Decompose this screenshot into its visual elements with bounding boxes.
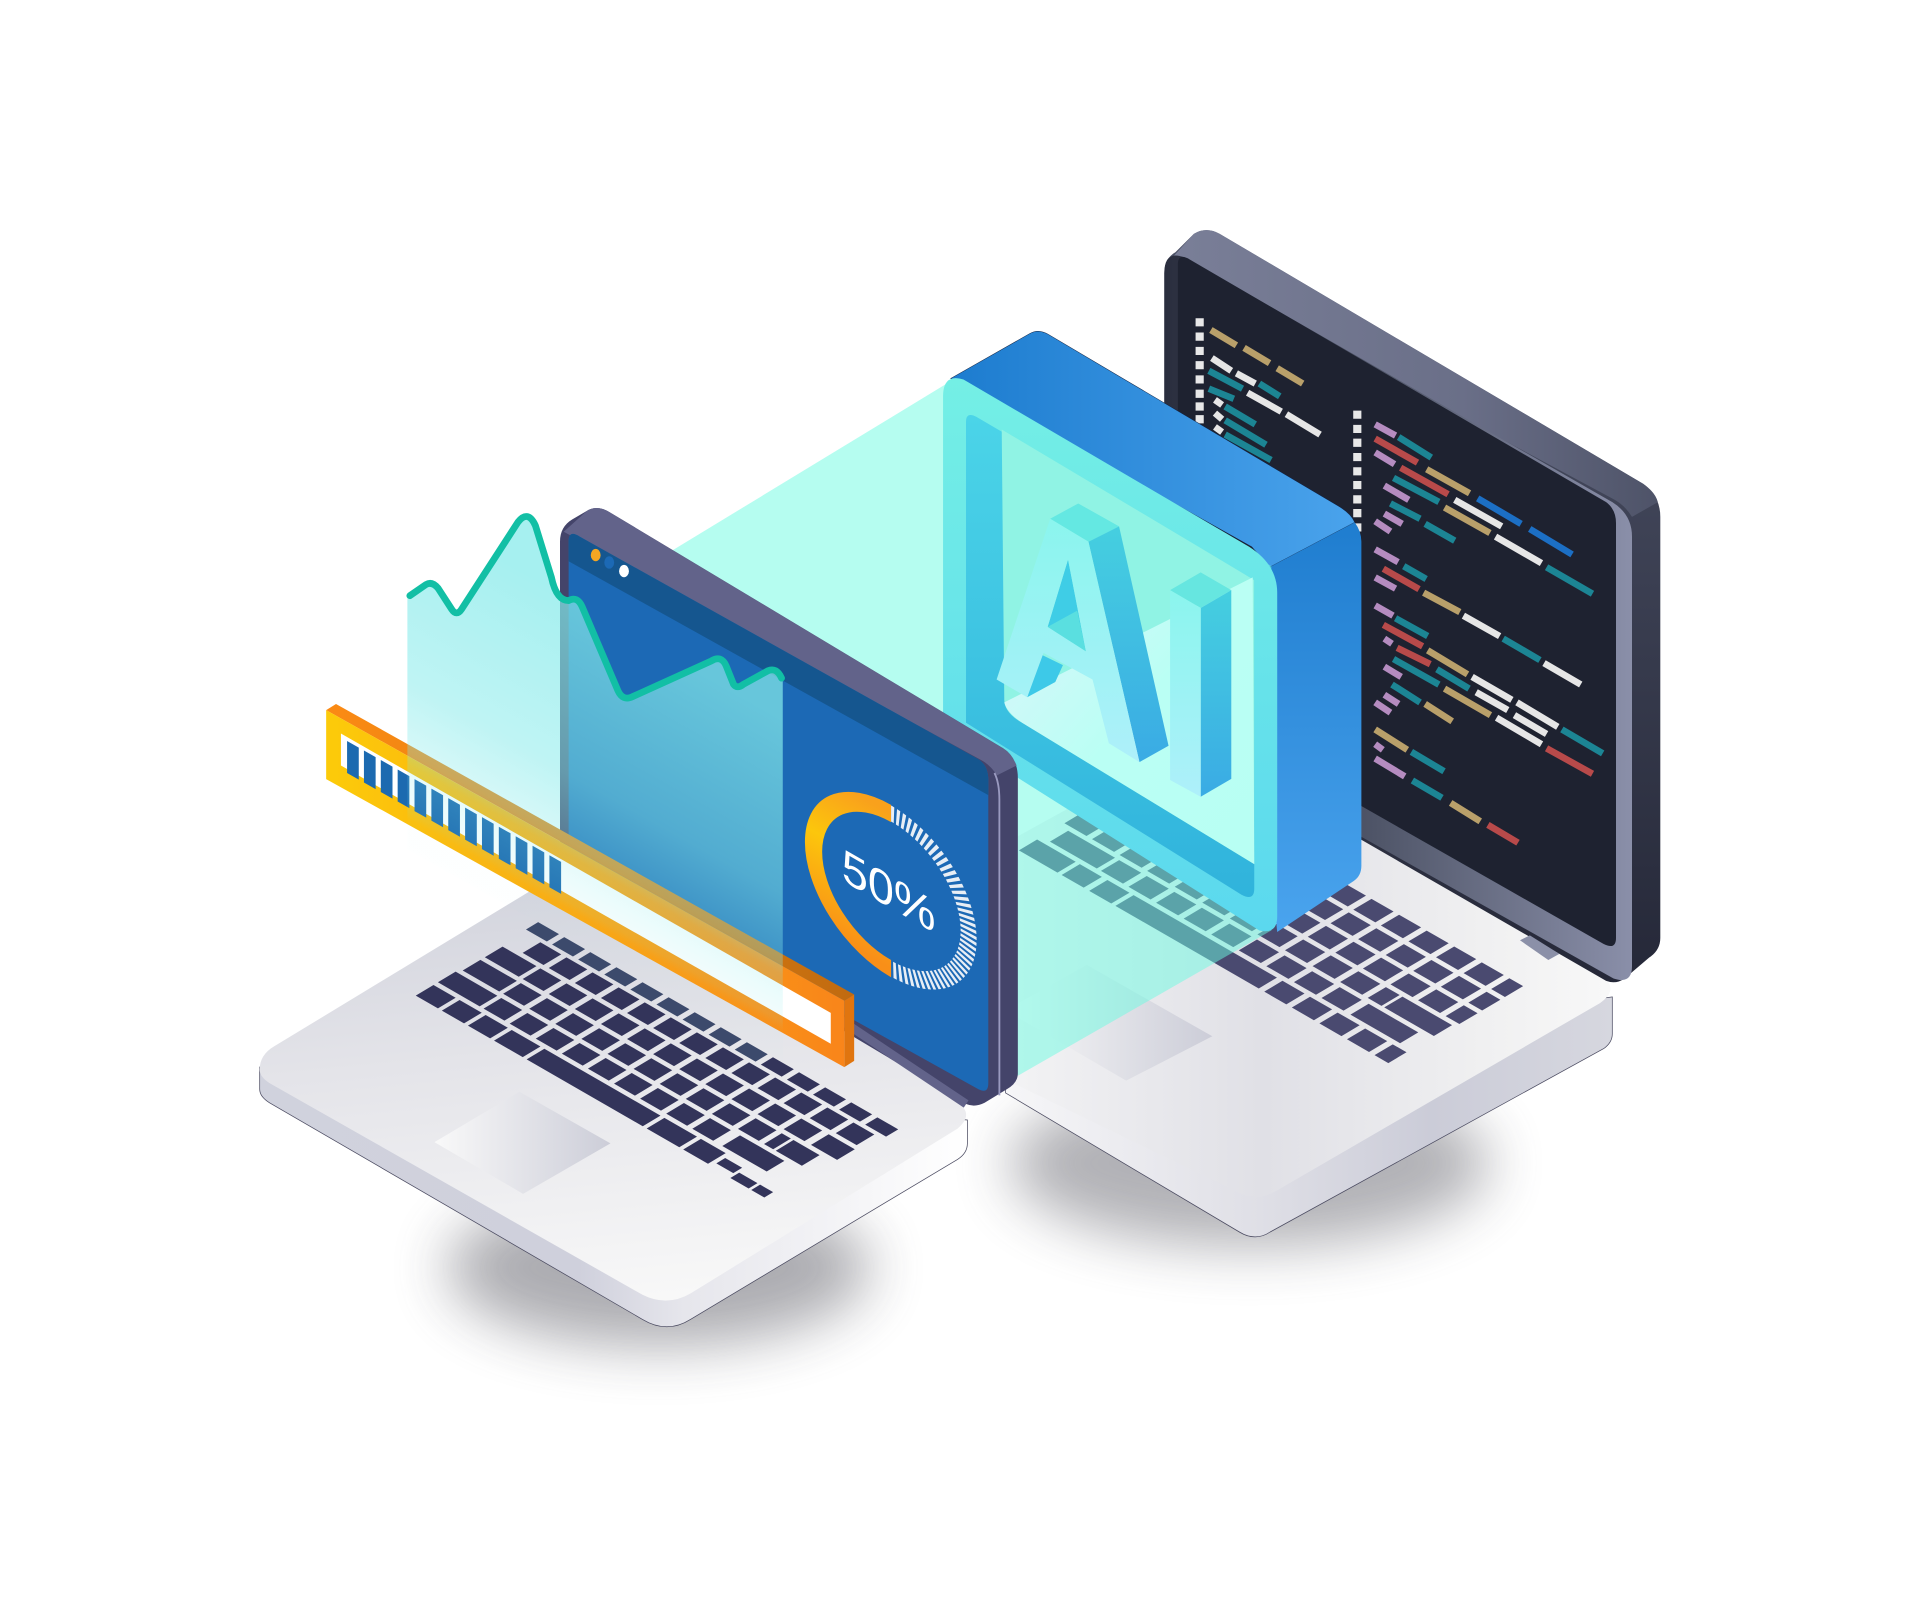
gauge ticks <box>891 814 969 1013</box>
front laptop blue screen <box>569 534 988 1091</box>
back laptop trackpad <box>1006 965 1212 1081</box>
cube inner recess <box>966 415 1254 897</box>
progress bar <box>326 704 854 1067</box>
cube window upper <box>1002 429 1254 864</box>
bar right face <box>844 994 854 1067</box>
translucent chart area <box>407 514 783 1061</box>
front laptop keyboard <box>419 926 892 1201</box>
bar segments <box>347 757 564 879</box>
screen title bar <box>569 534 988 795</box>
back laptop base <box>978 722 1612 1237</box>
gauge value: 50% <box>842 838 935 944</box>
translucent mint plane <box>671 382 1271 1076</box>
back laptop <box>978 230 1660 1237</box>
cube top face <box>951 331 1355 567</box>
cube right face <box>1257 522 1361 932</box>
ground shadows <box>447 1079 1489 1346</box>
back laptop screen frame <box>1164 230 1660 982</box>
bar window <box>341 734 831 1044</box>
cube front bevel <box>943 378 1277 931</box>
letter I <box>1170 572 1231 797</box>
cube window lower <box>1004 577 1254 864</box>
gauge orange arc <box>814 769 891 969</box>
bar front face <box>326 710 844 1067</box>
front laptop trackpad <box>434 1092 610 1194</box>
chart line <box>410 516 782 698</box>
letter A <box>997 503 1169 762</box>
back laptop code screen <box>1178 257 1616 946</box>
front laptop screen frame <box>560 508 1018 1106</box>
gauge 50% <box>814 769 969 1013</box>
back laptop keyboard <box>1028 777 1514 1059</box>
code lines <box>1196 322 1603 843</box>
window dots <box>591 549 629 577</box>
AI cube sides <box>951 331 1361 932</box>
bar top face <box>326 704 854 1001</box>
front laptop base <box>260 843 967 1327</box>
AI cube glass face <box>943 378 1277 931</box>
front laptop <box>260 508 1018 1327</box>
